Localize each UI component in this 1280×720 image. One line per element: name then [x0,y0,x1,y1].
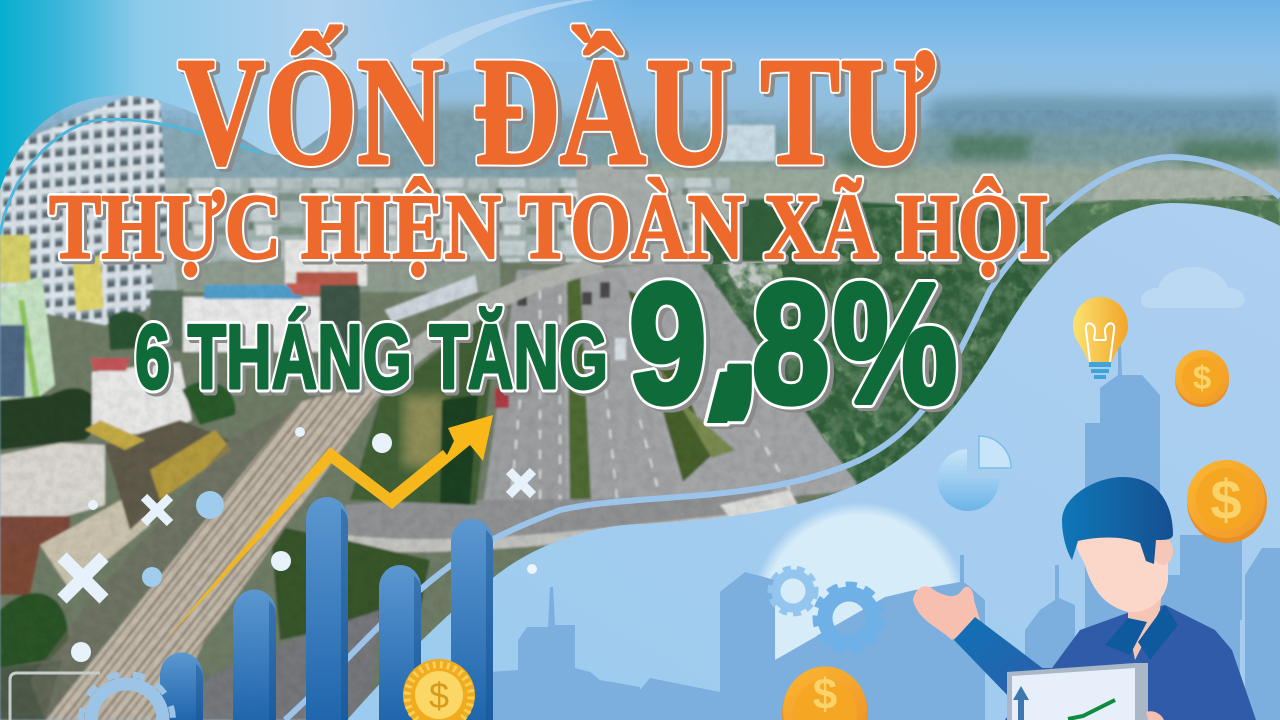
hair [1062,477,1173,564]
icon: small gear [770,568,816,614]
white house with blue roof [183,297,320,352]
vehicles [495,388,509,408]
light blue foreground panel [347,203,1280,720]
city skyline silhouette [490,345,1280,720]
greenery below the viaduct [350,300,500,505]
headline figure: 9,8%: 9,8% [629,238,957,438]
shirt [1005,605,1256,720]
bar 1 [160,652,203,720]
bar 3 [306,497,348,720]
bar 4 [379,565,421,720]
face [1073,530,1168,612]
title line 2: THỰC HIỆN TOÀN XÃ HỘI: THỰC HIỆN TOÀN XÃ HỘI [52,179,1052,282]
flyover [345,490,800,544]
low buildings and yards [0,443,105,518]
title line 3: 6 THÁNG TĂNG: 6 THÁNG TĂNG [138,310,611,411]
icon: bottom dollar coin: $ [813,670,837,719]
headline figure: 9,8%: 9,8% [629,238,957,438]
bar chart [160,497,493,720]
title line 1: VỐN ĐẦU TƯ: VỐN ĐẦU TƯ [178,25,935,197]
ear [1153,537,1173,565]
white block behind houses [285,240,367,286]
icon: large dollar coin [1187,460,1267,543]
far road and roofs [575,165,700,265]
coin on bars [403,659,475,720]
elevated metro viaduct [358,258,604,398]
median between ramps [476,262,860,525]
title line 1: VỐN ĐẦU TƯ: VỐN ĐẦU TƯ [182,28,939,200]
cyan arc line [0,119,261,235]
light swoosh band [410,0,595,70]
person with tablet [913,477,1256,720]
neck [1128,590,1162,660]
title line 1: VỐN ĐẦU TƯ: VỐN ĐẦU TƯ [178,25,935,197]
coin on bars: $ [429,675,449,716]
distant landscape strips [160,95,1280,210]
headline figure: 9,8%: 9,8% [633,241,961,441]
bar side shading [196,508,493,720]
icon: pie chart [937,436,1011,511]
photo foliage texture [690,190,1280,500]
top-left cyan gradient swoosh [0,0,640,190]
green medians [567,270,591,505]
background sky and distant haze [0,0,1280,300]
title line 2: THỰC HIỆN TOÀN XÃ HỘI: THỰC HIỆN TOÀN XÃ HỘI [49,176,1049,279]
holding hand [1146,711,1164,720]
yellow growth arrow [165,415,493,640]
icon: small dollar coin [1175,350,1229,407]
glow circle [752,502,968,718]
icon: gear bottom left [10,673,173,720]
icon: small dollar coin: $ [1193,359,1211,396]
road lower left [200,610,380,720]
lower right blue wave band [285,157,1280,720]
mid-distance city blocks [160,178,730,268]
title line 3: 6 THÁNG TĂNG: 6 THÁNG TĂNG [135,307,608,408]
icon: cloud [1141,267,1245,308]
hand [913,586,980,640]
railway deck [45,385,378,720]
green building [0,276,55,402]
trees right of the highway [690,199,1100,490]
bar 5 [451,519,493,720]
title line 3: 6 THÁNG TĂNG [135,307,611,411]
highway lanes [480,270,567,525]
tall residential tower [0,95,172,325]
icon: light bulb [1073,297,1128,379]
white dot on panel [527,564,537,574]
bar 2 [233,589,276,720]
white house with red roof [92,362,192,434]
trees around houses [108,311,152,350]
tablet [1007,663,1148,720]
title line 3: 6 THÁNG TĂNG: 6 THÁNG TĂNG [135,307,608,408]
lane dashes [510,290,790,510]
icon: large gear [816,585,882,651]
tablet chart arrow [1013,686,1029,720]
shirt collar [1105,605,1178,660]
icon: large dollar coin: $ [1210,468,1242,531]
tablet chart line [1068,700,1115,719]
icon: bottom dollar coin [782,666,868,720]
decorative dots and crosses [62,427,533,662]
title line 2: THỰC HIỆN TOÀN XÃ HỘI: THỰC HIỆN TOÀN XÃ HỘI [49,176,1049,279]
sleeve [954,617,1045,700]
